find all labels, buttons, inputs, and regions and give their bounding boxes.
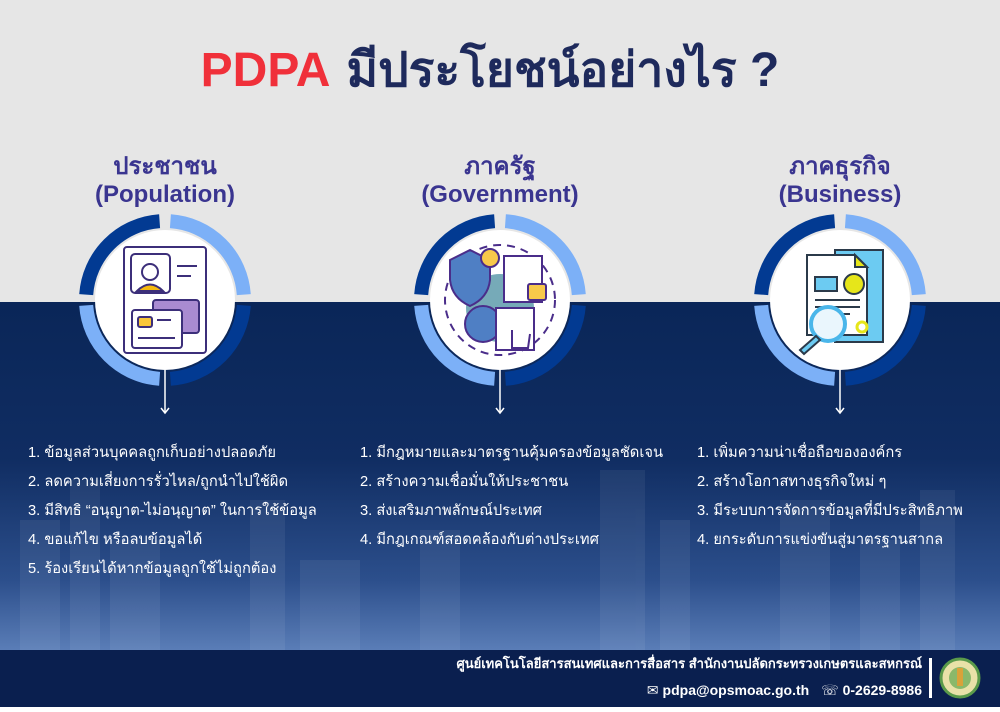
column: business (697, 153, 963, 548)
footer (0, 650, 1000, 707)
icon ring (86, 221, 244, 379)
icon ring (761, 221, 919, 379)
footer: contact: ✉ pdpa@opsmoac.go.th ☏ 0-2629-8986 (647, 682, 922, 698)
list: 4. มีกฎเกณฑ์สอดคล้องกับต่างประเทศ (360, 531, 600, 548)
column: population: (Population) (95, 181, 235, 208)
column: business: (Business) (779, 181, 901, 208)
list (28, 442, 317, 577)
list: 2. ลดความเสี่ยงการรั่วไหล/ถูกนำไปใช้ผิด (28, 471, 288, 490)
list (697, 442, 963, 548)
list: 3. ส่งเสริมภาพลักษณ์ประเทศ (360, 502, 543, 519)
icon: id document (124, 247, 206, 353)
column: government (360, 153, 663, 548)
list: 4. ยกระดับการแข่งขันสู่มาตรฐานสากล (697, 532, 943, 548)
list: 1. ข้อมูลส่วนบุคคลถูกเก็บอย่างปลอดภัย (28, 442, 276, 461)
icon: law & data protection (445, 245, 555, 355)
list: 1. มีกฎหมายและมาตรฐานคุ้มครองข้อมูลชัดเจน (360, 444, 663, 461)
arrow (836, 370, 844, 413)
footer: organization name: ศูนย์เทคโนโลยีสารสนเทศและการสื่อสาร สำนักงานปลัดกระทรวงเกษตรและสหกรณ์ (456, 654, 922, 672)
logo (941, 659, 979, 697)
heading: ภาครัฐ (464, 153, 536, 182)
list: 3. มีสิทธิ “อนุญาต-ไม่อนุญาต” ในการใช้ข้อมูล (28, 501, 317, 519)
list: 2. สร้างความเชื่อมั่นให้ประชาชน (360, 471, 568, 490)
arrow (496, 370, 504, 413)
heading: ภาคธุรกิจ (789, 153, 891, 182)
title: PDPA มีประโยชน์อย่างไร ? (201, 41, 779, 97)
list: 1. เพิ่มความน่าเชื่อถือขององค์กร (697, 442, 902, 461)
list: 5. ร้องเรียนได้หากข้อมูลถูกใช้ไม่ถูกต้อง (28, 559, 276, 577)
list: 3. มีระบบการจัดการข้อมูลที่มีประสิทธิภาพ (697, 500, 963, 519)
icon ring (421, 221, 579, 379)
arrow (161, 370, 169, 413)
column: government: (Government) (421, 181, 579, 208)
column: population (28, 153, 317, 577)
list (360, 444, 663, 548)
heading: ประชาชน (113, 153, 217, 180)
city silhouette (20, 470, 955, 650)
icon: report with magnifier (800, 250, 883, 354)
list: 4. ขอแก้ไข หรือลบข้อมูลได้ (28, 530, 202, 548)
list: 2. สร้างโอกาสทางธุรกิจใหม่ ๆ (697, 472, 886, 490)
